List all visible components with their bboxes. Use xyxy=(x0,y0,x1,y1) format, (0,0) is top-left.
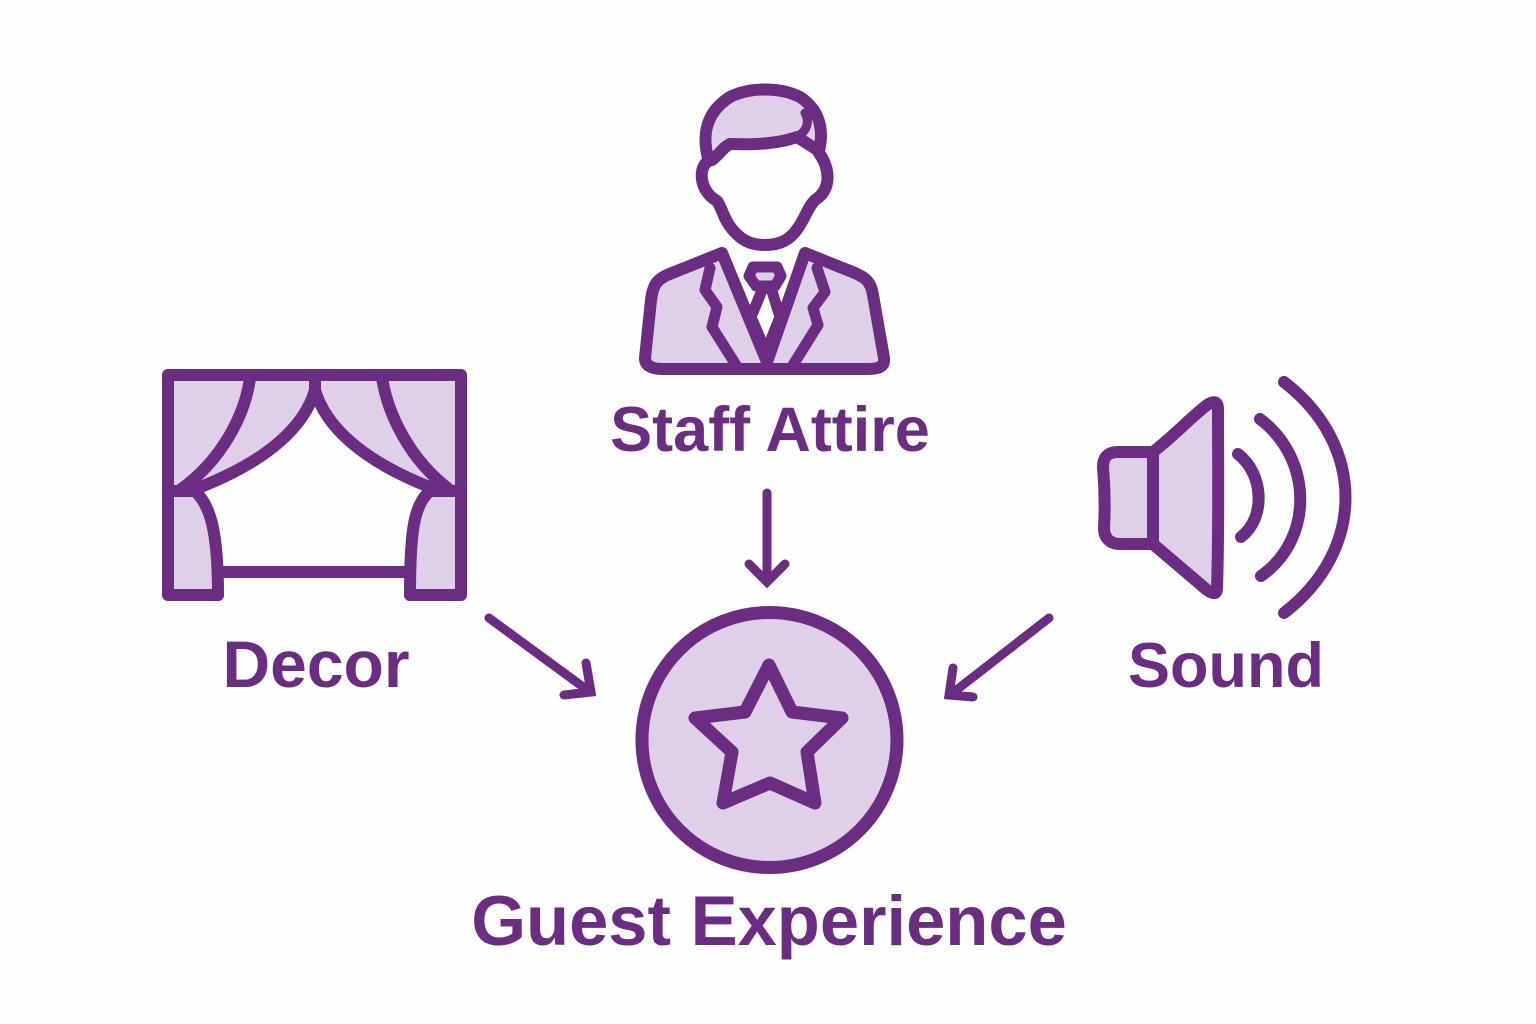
tie knot xyxy=(749,267,781,286)
label: Guest Experience: Guest Experience xyxy=(471,881,1067,960)
upper left drape xyxy=(168,375,315,488)
label: Sound: Sound xyxy=(1128,631,1324,701)
label: Staff Attire: Staff Attire xyxy=(610,395,930,465)
lower right drape xyxy=(410,490,461,595)
arrow: staff attire to guest experience xyxy=(749,493,785,582)
icon: stage curtain xyxy=(168,375,461,595)
arrow: sound to guest experience xyxy=(949,618,1049,697)
arrow: decor to guest experience xyxy=(489,618,591,695)
icon: staff person in suit xyxy=(645,90,884,369)
tie xyxy=(751,288,780,352)
label: Decor: Decor xyxy=(222,627,410,701)
icon: loudspeaker xyxy=(1103,382,1346,613)
lower left drape xyxy=(168,490,218,595)
upper right drape xyxy=(315,375,461,488)
hair xyxy=(706,90,821,160)
lapels xyxy=(705,268,825,365)
icon: star in circle xyxy=(642,612,897,868)
face xyxy=(702,153,828,245)
suit jacket xyxy=(645,253,884,369)
